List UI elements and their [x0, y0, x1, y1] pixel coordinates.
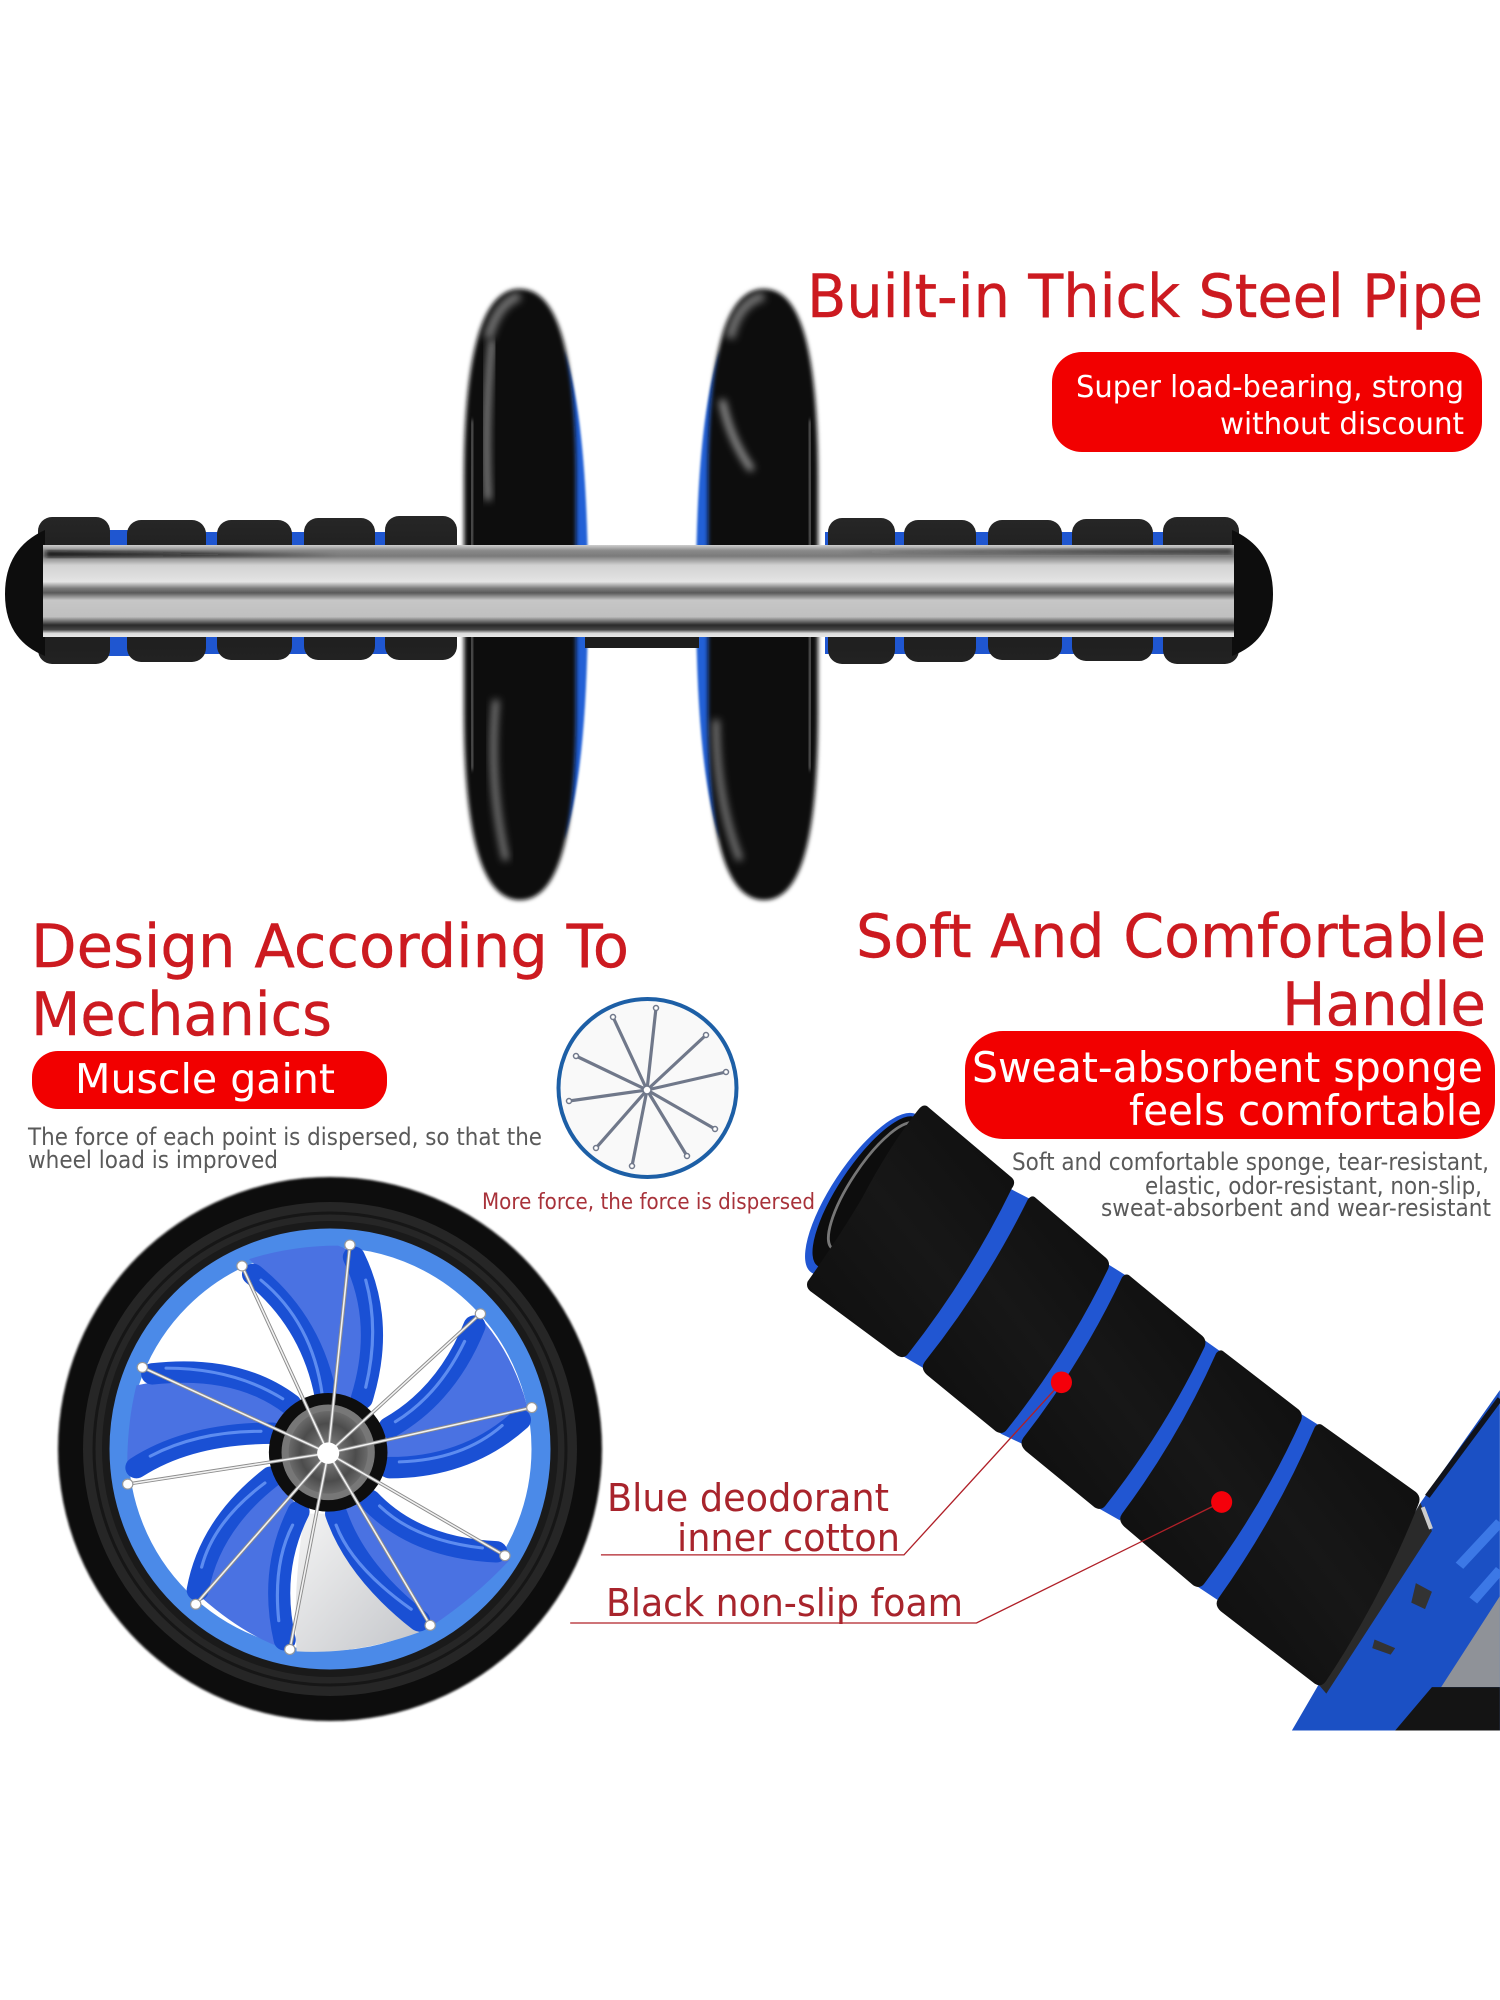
red pointer markers	[570, 1371, 1232, 1623]
callout pill: sweat-absorbent sponge: feels comfortable	[1129, 1086, 1482, 1135]
text: sponge description	[1012, 1148, 1491, 1222]
blue bands	[902, 1188, 1322, 1600]
wheel blades	[123, 1240, 537, 1654]
spokes	[128, 1245, 532, 1649]
wheel section at handle base	[1292, 1390, 1500, 1731]
axle under the bar	[585, 630, 699, 648]
text: force dispersed description	[27, 1123, 542, 1174]
caption: more force: More force, the force is dispersed	[482, 1190, 815, 1215]
right wheel	[696, 289, 818, 900]
product image: foam handle close-up	[570, 1098, 1500, 1731]
label: blue deodorant inner cotton: Blue deodorant	[607, 1476, 889, 1520]
steel pipe	[43, 545, 1234, 637]
text: force dispersed description: The force of each point is dispersed, so that the	[27, 1123, 542, 1151]
callout pill: sweat-absorbent sponge	[965, 1031, 1495, 1139]
heading: soft and comfortable handle: Handle	[1282, 970, 1486, 1040]
callout pill: muscle gaint: Muscle gaint	[75, 1055, 335, 1103]
label: blue deodorant inner cotton: inner cotton	[677, 1516, 900, 1560]
product image: ab roller front view	[5, 289, 1273, 900]
right end cap	[1232, 530, 1273, 656]
tire	[58, 1177, 602, 1721]
callout pill: super load-bearing: without discount	[1220, 407, 1464, 442]
bottom silver window	[296, 1514, 419, 1652]
blade swooshes	[136, 1257, 520, 1640]
blue rim	[119, 1238, 541, 1660]
label: black non-slip foam: Black non-slip foam	[606, 1581, 963, 1625]
text: force dispersed description: wheel load is improved	[28, 1146, 278, 1174]
callout pill: super load-bearing	[1052, 352, 1482, 452]
callout pill: muscle gaint	[32, 1051, 387, 1109]
title: built-in thick steel pipe: Built-in Thick Steel Pipe	[807, 262, 1483, 332]
heading: design according to mechanics: Design According To	[31, 912, 629, 982]
heading: design according to mechanics	[31, 912, 629, 1050]
right grip foam segments	[825, 517, 1239, 664]
hub	[269, 1393, 387, 1512]
spoke anchors	[123, 1240, 537, 1654]
blade fills	[127, 1246, 530, 1649]
foam segments	[807, 1105, 1420, 1685]
heading: design according to mechanics: Mechanics	[31, 980, 332, 1050]
product image: large wheel with spokes	[58, 1177, 602, 1721]
heading: soft and comfortable handle	[856, 902, 1486, 1040]
callout pill: sweat-absorbent sponge: Sweat-absorbent sponge	[972, 1043, 1483, 1092]
left end cap	[5, 530, 45, 656]
left wheel	[464, 289, 588, 900]
icon: spoke force diagram	[558, 999, 736, 1177]
callout pill: super load-bearing: Super load-bearing, strong	[1076, 370, 1464, 405]
end face	[784, 1098, 944, 1289]
heading: soft and comfortable handle: Soft And Comfortable	[856, 902, 1486, 972]
left grip foam segments	[38, 516, 457, 664]
label: blue deodorant inner cotton	[607, 1476, 900, 1560]
